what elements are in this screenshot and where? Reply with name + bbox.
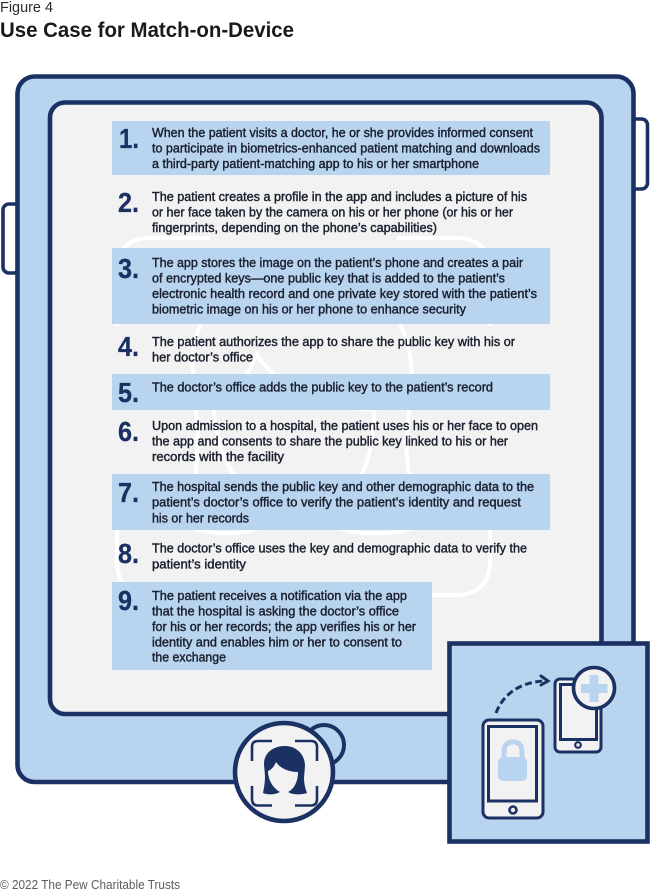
tablet screen	[50, 102, 602, 714]
step 5 band	[112, 374, 550, 410]
step 5 text: The doctor’s office adds the public key to the patient’s record	[152, 380, 493, 395]
step 7 band	[112, 474, 550, 530]
step 9	[112, 582, 432, 670]
step 9 text: the exchange	[152, 650, 226, 665]
step 7 text: patient’s doctor’s office to verify the patient’s identity and request	[152, 495, 521, 510]
step 4	[118, 331, 516, 364]
step 8 text	[152, 541, 527, 571]
step 3 text	[152, 255, 537, 317]
step 6 text: the app and consents to share the public key linked to his or her	[152, 433, 509, 448]
step 2 number: 2.	[118, 187, 139, 218]
step 7 text: his or her records	[152, 510, 249, 525]
tablet side button: left	[3, 204, 20, 273]
step 3 text: The app stores the image on the patient’s phone and creates a pair	[152, 255, 524, 270]
tablet button bump	[304, 725, 344, 765]
face scan circle	[235, 723, 333, 821]
icon: small phone	[555, 679, 601, 752]
title: Use Case for Match-on-Device	[0, 19, 294, 42]
panel: phones inset	[450, 644, 648, 842]
copyright: © 2022 The Pew Charitable Trusts	[0, 878, 180, 892]
step 6 text: Upon admission to a hospital, the patient uses his or her face to open	[152, 418, 538, 433]
step 9 band	[112, 582, 432, 670]
step 1 number: 1.	[119, 123, 139, 154]
step 1 text: When the patient visits a doctor, he or she provides informed consent	[152, 125, 533, 140]
step 9 text: for his or her records; the app verifies his or her	[152, 619, 417, 634]
step 3	[112, 248, 550, 324]
step 2 text: The patient creates a profile in the app and includes a picture of his	[152, 189, 527, 204]
step 8 text: The doctor’s office uses the key and demographic data to verify the	[152, 541, 527, 556]
step 6	[118, 416, 538, 464]
step 9 text: that the hospital is asking the doctor’s office	[152, 603, 399, 618]
step 7 text	[152, 479, 534, 525]
step 7 number: 7.	[118, 477, 139, 508]
icon: medical cross badge	[574, 668, 614, 708]
inset background	[450, 644, 648, 842]
arrow: dashed transfer arrow	[496, 676, 548, 713]
step 9 text: The patient receives a notification via the app	[152, 588, 407, 603]
step 3 text: biometric image on his or her phone to enhance security	[152, 302, 467, 317]
icon: large phone with lock	[483, 720, 543, 818]
step 5	[112, 374, 550, 410]
step 7 text: The hospital sends the public key and other demographic data to the	[152, 479, 534, 494]
step 3 number: 3.	[118, 253, 139, 284]
tablet illustration	[3, 76, 648, 782]
step 1 text	[152, 125, 540, 171]
step 9 text	[152, 588, 417, 665]
step 1 text: to participate in biometrics-enhanced patient matching and downloads	[152, 141, 540, 156]
step 7	[112, 474, 550, 530]
step 1 text: a third-party patient-matching app to his or her smartphone	[152, 156, 479, 171]
step 2 text: or her face taken by the camera on his or her phone (or his or her	[152, 205, 514, 220]
step 8	[118, 538, 527, 571]
step 9 text: identity and enables him or her to consent to	[152, 634, 402, 649]
step 6 number: 6.	[118, 416, 139, 447]
step 2 text: fingerprints, depending on the phone’s capabilities)	[152, 220, 437, 235]
hair	[263, 746, 307, 794]
step 8 number: 8.	[118, 538, 139, 569]
step 4 number: 4.	[118, 331, 139, 362]
tablet side button: right	[630, 119, 648, 189]
tablet body	[18, 76, 634, 782]
step 4 text: her doctor’s office	[152, 349, 253, 364]
step 9 number: 9.	[118, 585, 139, 616]
step 3 band	[112, 248, 550, 324]
step 3 text: of encrypted keys—one public key that is added to the patient’s	[152, 271, 505, 286]
step 6 text	[152, 418, 538, 464]
scan brackets	[252, 741, 317, 806]
step 4 text	[152, 334, 516, 364]
step 8 text: patient’s identity	[152, 556, 247, 571]
step 4 text: The patient authorizes the app to share the public key with his or	[152, 334, 516, 349]
step 6 text: records with the facility	[152, 449, 285, 464]
step 3 text: electronic health record and one private key stored with the patient’s	[152, 286, 537, 301]
watermark: white face-scan outline	[117, 238, 490, 595]
step 1	[112, 121, 550, 175]
icon: face scan home button	[235, 723, 344, 821]
step 5 number: 5.	[118, 377, 139, 408]
step 2 text	[152, 189, 527, 235]
step 1 band	[112, 121, 550, 175]
step 2	[118, 187, 527, 235]
